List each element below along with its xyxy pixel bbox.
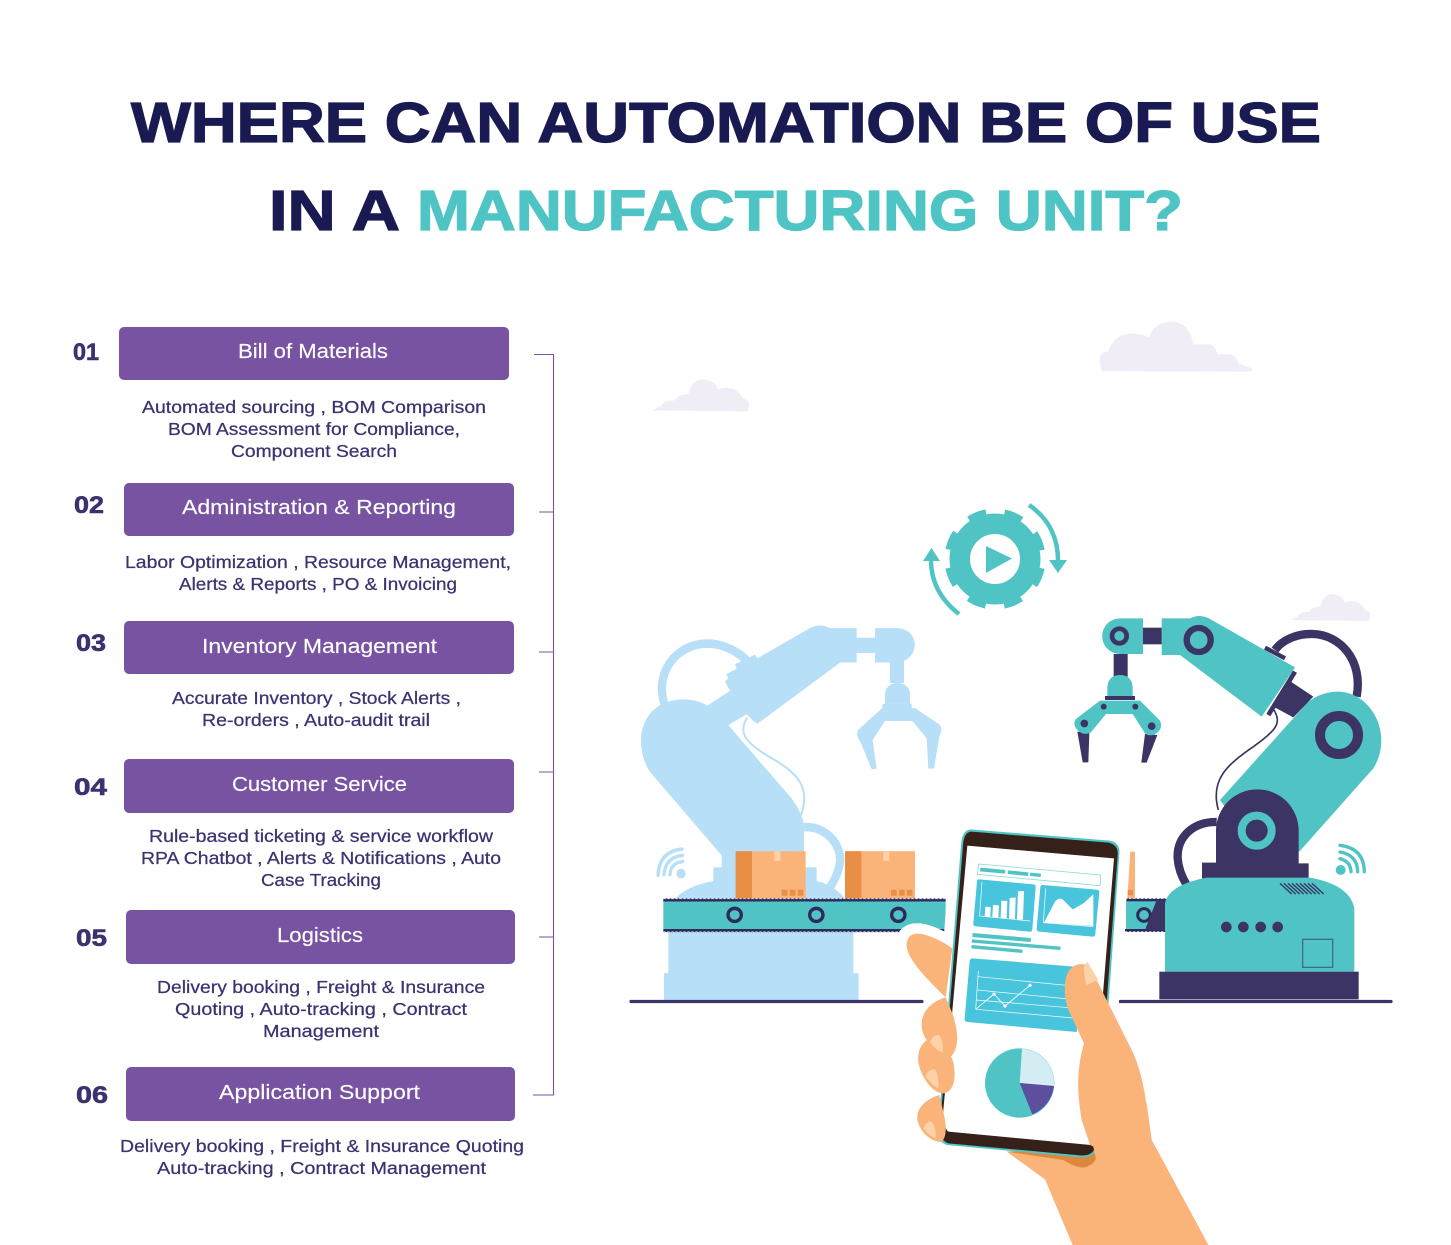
robot base housing xyxy=(1165,878,1354,972)
bracket connector xyxy=(533,354,554,1095)
item 04: customer service: Customer Service xyxy=(232,773,407,796)
item 04: customer service: RPA Chatbot , Alerts & Notifications , Auto xyxy=(141,848,501,868)
item 06: application support: Application Support xyxy=(219,1081,420,1104)
item 06: application support xyxy=(76,1067,524,1178)
screen text lines xyxy=(971,933,1061,953)
gripper xyxy=(1074,675,1161,763)
left robot arm with conveyor xyxy=(641,625,946,1000)
box 1 xyxy=(736,851,806,899)
cables xyxy=(1178,634,1358,885)
item 05: logistics: Quoting , Auto-tracking , Contract xyxy=(175,999,467,1019)
item 01: bill of materials: BOM Assessment for Compliance, xyxy=(168,419,460,439)
palm shadow xyxy=(1007,1150,1097,1167)
cables xyxy=(662,644,840,887)
item 03: inventory management: 03 xyxy=(76,630,106,657)
item 06: application support: 06 xyxy=(76,1082,108,1109)
item 03: inventory management: Inventory Management xyxy=(202,635,437,658)
item 01: bill of materials: Automated sourcing , BOM Comparison xyxy=(142,397,486,417)
forearm xyxy=(1162,616,1295,717)
item 02: administration and reporting: Administration & Reporting xyxy=(182,496,456,519)
item 03: inventory management xyxy=(76,621,514,730)
middle finger xyxy=(918,997,957,1093)
screen line chart card xyxy=(965,958,1083,1032)
item 01: bill of materials xyxy=(73,327,509,461)
title: IN A xyxy=(269,179,400,243)
item 03: inventory management: Accurate Inventory , Stock Alerts , xyxy=(172,688,461,708)
upper arm xyxy=(1220,692,1381,852)
conveyor belt xyxy=(663,898,946,932)
cloud: large xyxy=(1100,322,1253,372)
thumb and palm front xyxy=(1065,964,1208,1245)
cloud: small left xyxy=(652,379,749,411)
panel: list of automation areas xyxy=(73,327,524,1178)
item 06: application support: Delivery booking , Freight & Insurance Quoting xyxy=(120,1136,524,1156)
item 04: customer service: 04 xyxy=(74,774,108,801)
index finger xyxy=(907,934,952,997)
palm behind phone xyxy=(1007,1043,1208,1245)
cloud: small right xyxy=(1291,594,1370,621)
icon: gear with play button xyxy=(923,503,1067,615)
item 01: bill of materials: Bill of Materials xyxy=(238,340,388,363)
item 01: bill of materials: 01 xyxy=(73,339,99,366)
icon: left wifi signal xyxy=(658,849,686,878)
item 02: administration and reporting: Alerts & Reports , PO & Invoicing xyxy=(179,574,457,594)
icon: right wifi signal xyxy=(1336,845,1364,875)
right robot arm xyxy=(1074,616,1381,999)
item 05: logistics: 05 xyxy=(76,925,107,952)
item 06: application support: Auto-tracking , Contract Management xyxy=(157,1158,486,1178)
item 02: administration and reporting: 02 xyxy=(74,492,104,519)
hand holding phone xyxy=(906,829,1208,1245)
elbow joint xyxy=(1273,680,1313,717)
phone white halo xyxy=(906,829,1119,1143)
item 05: logistics: Delivery booking , Freight & Insurance xyxy=(157,977,485,997)
screen pie chart xyxy=(985,1048,1054,1118)
item 01: bill of materials: Component Search xyxy=(231,441,397,461)
finger nails xyxy=(923,1035,943,1139)
small belt section xyxy=(1125,852,1170,932)
floor lines xyxy=(631,1000,1391,1003)
title: WHERE CAN AUTOMATION BE OF USE xyxy=(131,91,1321,155)
item 04: customer service: Case Tracking xyxy=(261,870,381,890)
item 04: customer service xyxy=(74,759,514,890)
title: MANUFACTURING UNIT? xyxy=(417,179,1183,243)
item 05: logistics: Logistics xyxy=(277,924,363,947)
item 05: logistics: Management xyxy=(263,1021,379,1041)
item 04: customer service: Rule-based ticketing & service workflow xyxy=(149,826,493,846)
thumb nail xyxy=(1084,962,1098,985)
item 02: administration and reporting: Labor Optimization , Resource Management, xyxy=(125,552,511,572)
little finger xyxy=(917,1095,946,1142)
shoulder xyxy=(1202,789,1309,878)
item 02: administration and reporting xyxy=(74,483,514,594)
item 05: logistics xyxy=(76,910,515,1041)
box 2 xyxy=(845,851,915,899)
screen area chart card xyxy=(1037,885,1099,937)
screen bar chart card xyxy=(973,879,1036,932)
phone xyxy=(938,829,1119,1157)
screen header bar xyxy=(977,864,1101,886)
item 03: inventory management: Re-orders , Auto-audit trail xyxy=(202,710,430,730)
robot body xyxy=(641,691,804,855)
title xyxy=(131,91,1321,243)
robot pedestal xyxy=(664,931,859,1000)
